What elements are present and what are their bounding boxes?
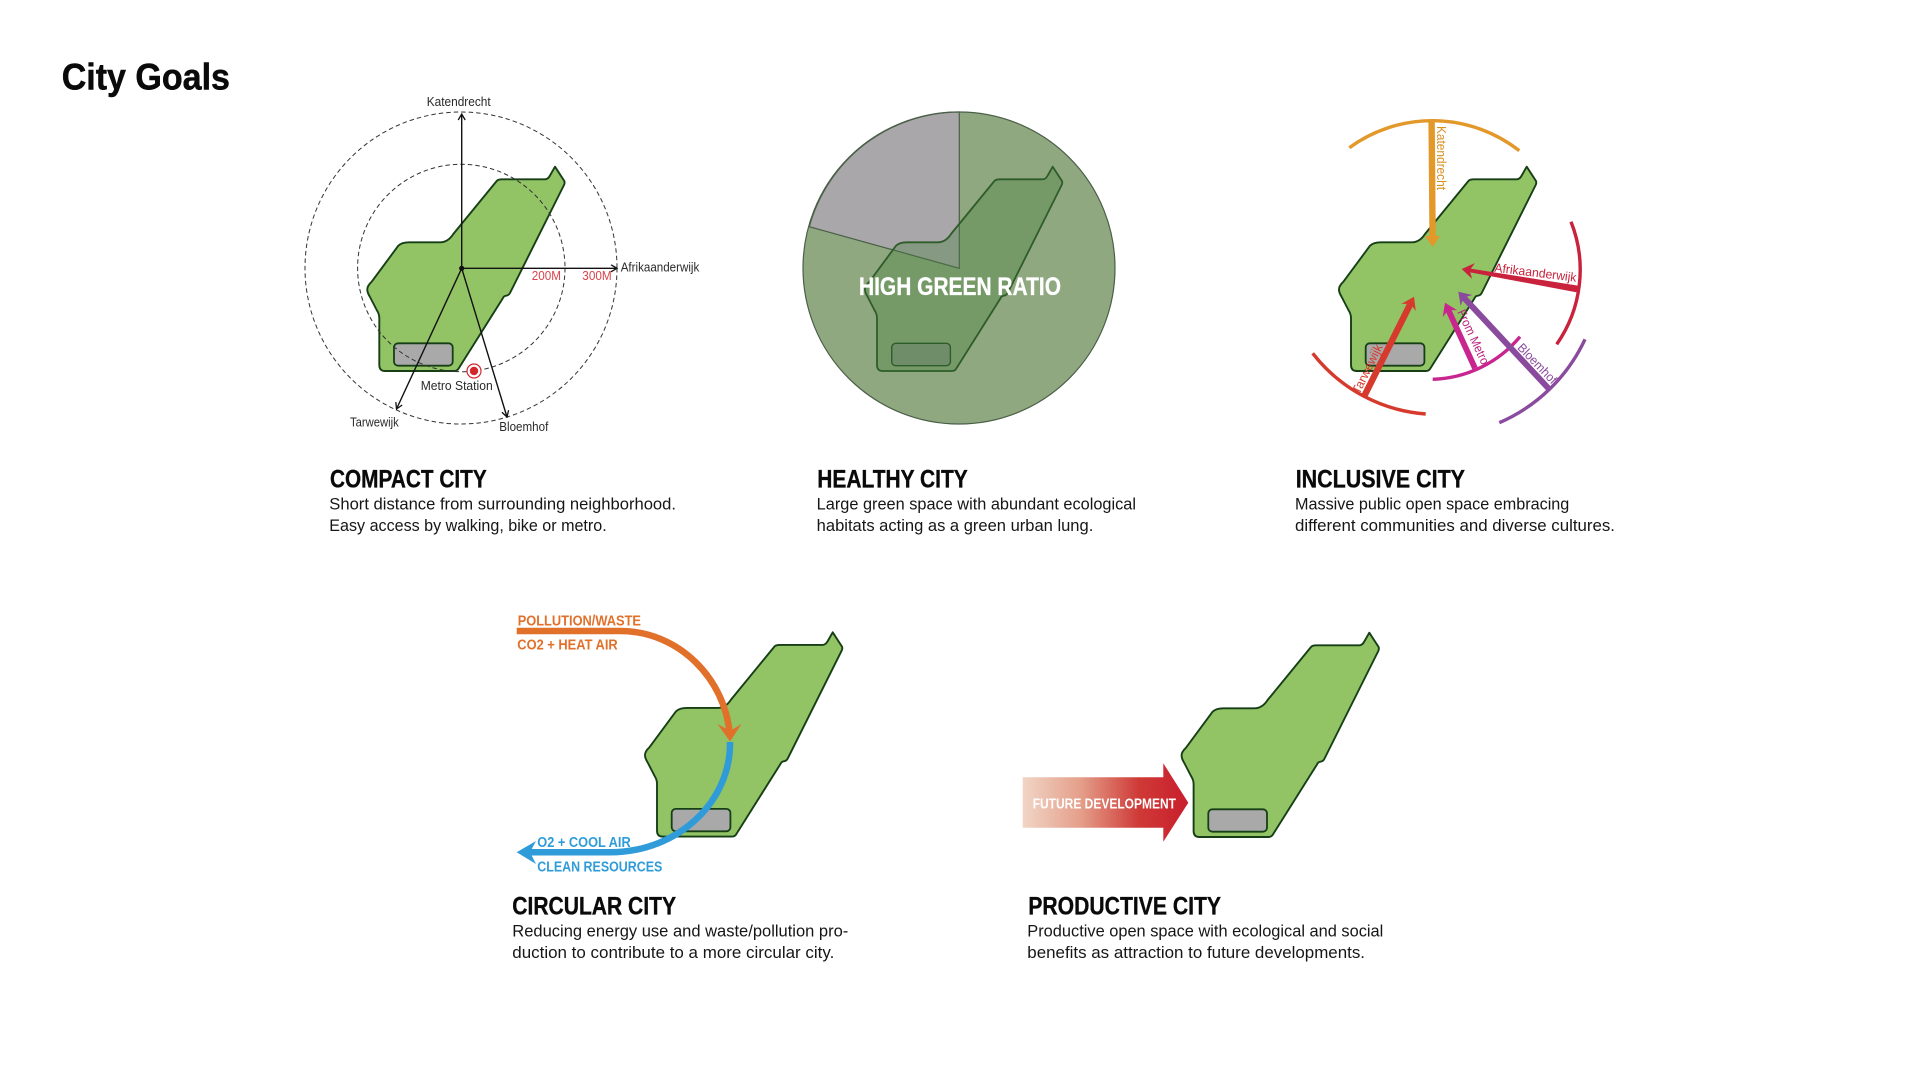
map: site plan overlay: [865, 167, 1062, 371]
pie: green ratio: [803, 112, 1115, 424]
icon: metro station: [467, 364, 481, 378]
panel: circular city: [517, 614, 842, 876]
text: circular city description: duction to contribute to a more circular city.: [512, 944, 834, 962]
panel: productive city: [1023, 633, 1379, 842]
label: future development: FUTURE DEVELOPMENT: [1033, 796, 1176, 812]
label: Katendrecht: Katendrecht: [427, 95, 491, 109]
arrow: Katendrecht: Katendrecht: [1434, 126, 1448, 190]
arrows to neighborhoods: [396, 114, 617, 417]
arrow: Afrikaanderwijk: Afrikaanderwijk: [1494, 261, 1578, 285]
heading: productive city: PRODUCTIVE CITY: [1028, 892, 1221, 920]
arrow: Bloemhof: [1452, 286, 1585, 423]
heading: circular city: CIRCULAR CITY: [512, 892, 676, 920]
label: 200M: 200M: [532, 269, 561, 283]
label: co2 + heat air: CO2 + HEAT AIR: [517, 637, 618, 653]
text: compact city description: [329, 496, 676, 535]
label: Metro Station: Metro Station: [421, 379, 493, 393]
distance rings: [305, 112, 617, 424]
map: site plan: [645, 632, 842, 837]
arrow: orange inflow: [517, 631, 742, 742]
map: site plan: [1182, 633, 1379, 837]
text: healthy city description: Large green space with abundant ecological: [817, 496, 1136, 514]
arrow: Tarwewijk: [1313, 293, 1426, 414]
title: City Goals: [62, 56, 230, 97]
arrow: future development: [1023, 763, 1188, 842]
label: Bloemhof: Bloemhof: [499, 420, 549, 434]
label: Tarwewijk: Tarwewijk: [350, 416, 399, 430]
label: high green ratio: HIGH GREEN RATIO: [859, 273, 1061, 301]
text: inclusive city description: Massive public open space embracing: [1295, 496, 1569, 514]
text: circular city description: [512, 923, 848, 962]
text: inclusive city description: different communities and diverse cultures.: [1295, 517, 1615, 535]
label: 300M: 300M: [582, 269, 612, 283]
panel: healthy city: [803, 112, 1115, 424]
panel: inclusive city: [1313, 121, 1585, 423]
text: productive city description: benefits as attraction to future developments.: [1027, 944, 1365, 962]
arrow: From Metro: From Metro: [1454, 307, 1492, 367]
text: inclusive city description: [1295, 496, 1615, 535]
heading: compact city: COMPACT CITY: [330, 465, 487, 493]
arrow: blue outflow: [517, 742, 730, 864]
arrow: Katendrecht: [1349, 121, 1519, 247]
arrow: Tarwewijk: Tarwewijk: [1349, 341, 1386, 396]
label: Afrikaanderwijk: Afrikaanderwijk: [621, 261, 700, 275]
heading: inclusive city: INCLUSIVE CITY: [1296, 465, 1465, 493]
arrow: Bloemhof: Bloemhof: [1515, 341, 1560, 387]
text: productive city description: [1027, 923, 1383, 962]
panel: compact city: [305, 95, 700, 434]
heading: healthy city: HEALTHY CITY: [817, 465, 968, 493]
text: compact city description: Easy access by walking, bike or metro.: [329, 517, 607, 535]
text: healthy city description: habitats acting as a green urban lung.: [817, 517, 1093, 535]
arrow: Afrikaanderwijk: [1460, 222, 1580, 344]
arrow: From Metro: [1433, 299, 1520, 379]
text: healthy city description: [817, 496, 1136, 535]
text: compact city description: Short distance from surrounding neighborhood.: [329, 496, 676, 514]
label: o2 + cool air: O2 + COOL AIR: [537, 835, 631, 851]
text: productive city description: Productive open space with ecological and social: [1027, 923, 1383, 941]
label: pollution/waste: POLLUTION/WASTE: [518, 614, 641, 630]
label: clean resources: CLEAN RESOURCES: [537, 860, 663, 876]
text: circular city description: Reducing energy use and waste/pollution pro-: [512, 923, 848, 941]
map: site plan with walking radius: [367, 167, 565, 371]
map: site plan: [1339, 167, 1536, 371]
